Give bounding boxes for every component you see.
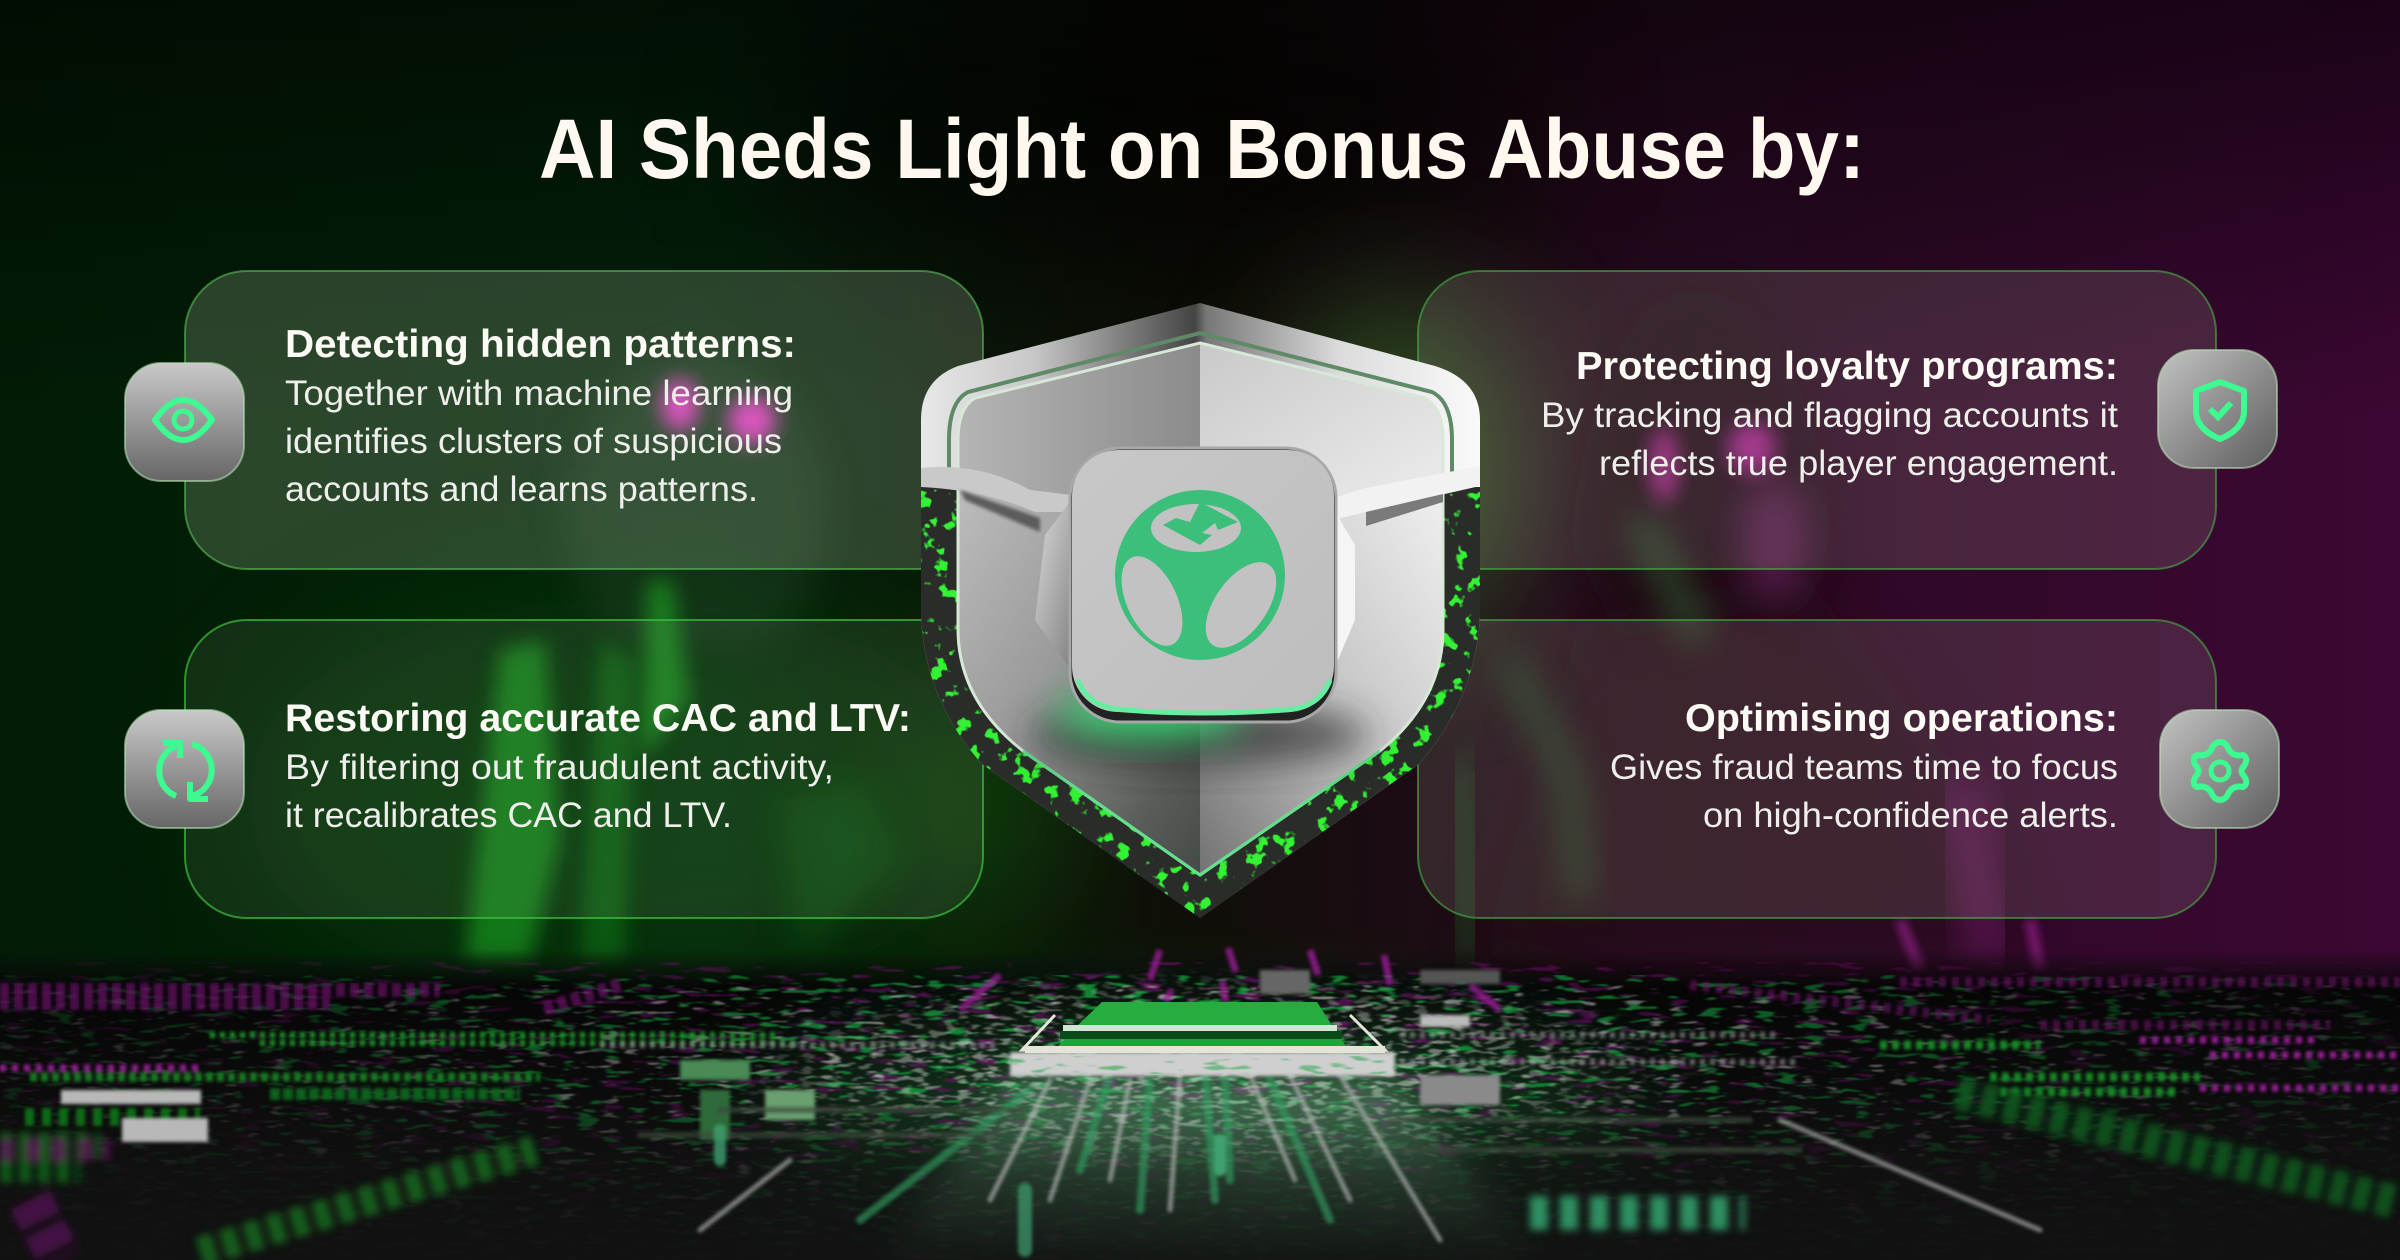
blurred hacker figure: left: [465, 350, 900, 960]
icon: eye: [125, 363, 244, 481]
text block: protecting loyalty programs: [1541, 345, 2118, 483]
text block: optimising operations: Gives fraud teams time to focus: [1610, 748, 2118, 787]
magenta spikes above the chip: [960, 948, 1500, 1010]
title: AI Sheds Light on Bonus Abuse by:: [539, 102, 1865, 196]
shield straps: [921, 466, 1480, 532]
icon: shield with check: [2158, 350, 2277, 468]
text block: optimising operations: Optimising operations:: [1685, 697, 2118, 740]
circuit board floor: [0, 948, 2400, 1260]
blurred hacker figure: right: [1460, 290, 2040, 970]
cube: [1070, 448, 1336, 722]
dense speckle around the chip: [719, 972, 1698, 1166]
speckled circuit traces: [0, 962, 2400, 1260]
text block: detecting hidden patterns: Together with machine learning: [285, 374, 793, 413]
icon: gear: [2160, 710, 2279, 828]
shield body: [921, 303, 1480, 918]
text block: detecting hidden patterns: [285, 323, 796, 509]
icon: refresh arrows: [125, 710, 244, 828]
cube side brackets: [1035, 495, 1355, 690]
shield: [915, 303, 1485, 922]
panel: protecting loyalty programs: [1418, 271, 2216, 569]
text block: detecting hidden patterns: identifies clusters of suspicious: [285, 422, 782, 461]
text block: detecting hidden patterns: accounts and learns patterns.: [285, 470, 758, 509]
cube shadow and glow: [1030, 705, 1370, 765]
large blurred dots near the foreground: [0, 1093, 2400, 1260]
shield plate: [949, 333, 1452, 875]
text block: protecting loyalty programs: Protecting loyalty programs:: [1576, 345, 2118, 388]
text block: optimising operations: on high-confidence alerts.: [1703, 796, 2118, 835]
text block: detecting hidden patterns: Detecting hidden patterns:: [285, 323, 796, 366]
light streaks from the chip: [640, 1070, 2040, 1250]
text block: restoring accurate CAC and LTV: [285, 697, 911, 835]
dotted trace rows: [0, 982, 2400, 1117]
text block: restoring accurate CAC and LTV: By filtering out fraudulent activity,: [285, 748, 834, 787]
chip: [1010, 1002, 1395, 1076]
white component blocks: [61, 970, 1500, 1142]
panel: optimising operations: [1418, 620, 2216, 918]
panel: detecting hidden patterns: [185, 271, 983, 569]
text block: protecting loyalty programs: reflects true player engagement.: [1599, 444, 2118, 483]
shield lower rim with green circuitry: [915, 487, 1485, 922]
panel: restoring accurate CAC and LTV: [185, 620, 983, 918]
text block: optimising operations: [1610, 697, 2118, 835]
logo: [1109, 490, 1290, 660]
light fan below the chip: [880, 1075, 1540, 1260]
text block: restoring accurate CAC and LTV: Restoring accurate CAC and LTV:: [285, 697, 911, 740]
text block: protecting loyalty programs: By tracking and flagging accounts it: [1541, 396, 2118, 435]
text block: restoring accurate CAC and LTV: it recalibrates CAC and LTV.: [285, 796, 732, 835]
